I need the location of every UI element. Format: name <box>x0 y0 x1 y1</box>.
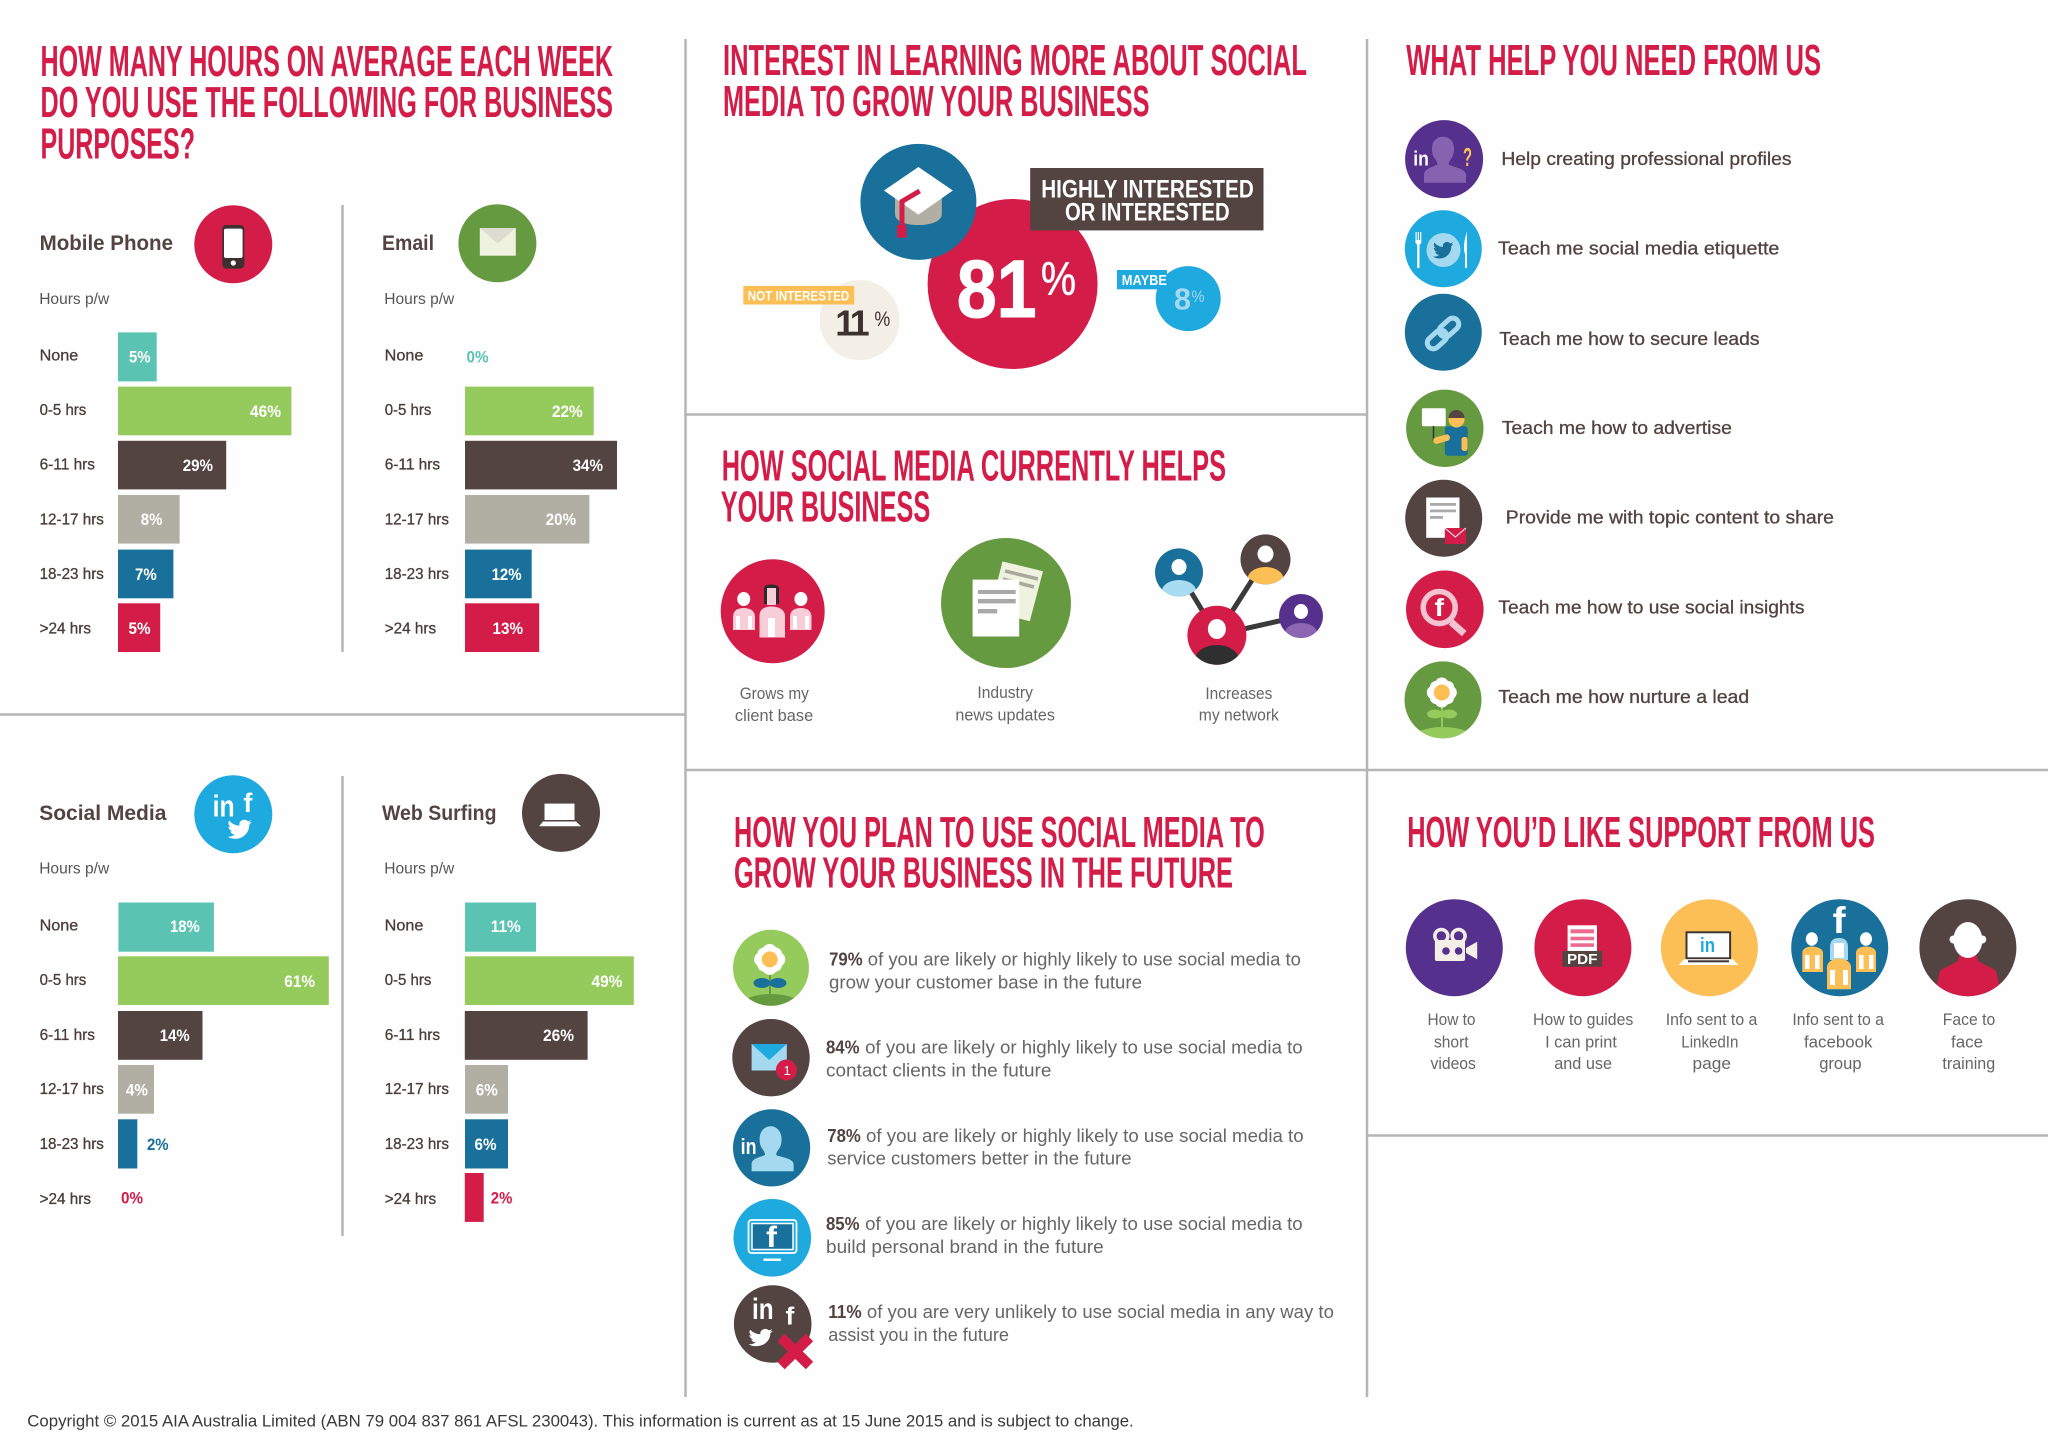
row: None 5%: None <box>40 347 78 364</box>
row: 6-11 hrs 29% <box>40 441 226 489</box>
title: how social media helps <box>721 442 1226 532</box>
row: 6-11 hrs 26%: 26% <box>543 1026 574 1045</box>
item: social insights: f <box>1434 594 1445 622</box>
row: 6-11 hrs 14% <box>40 1011 202 1060</box>
item: PDF guides: and use <box>1554 1055 1612 1073</box>
icon: social media: in <box>213 789 235 824</box>
row: >24 hrs 5%: 5% <box>128 619 150 638</box>
title: how social media helps: YOUR BUSINESS <box>721 484 930 532</box>
row: 0-5 hrs 61%: 0-5 hrs <box>40 972 87 989</box>
row: 12-17 hrs 6%: 6% <box>476 1081 498 1100</box>
icon: laptop <box>522 774 600 852</box>
bar chart: email <box>385 347 617 652</box>
item: 78% service customers: 78% <box>827 1125 861 1146</box>
row: 6-11 hrs 34% <box>385 441 617 489</box>
row: 18-23 hrs 6% <box>385 1119 508 1168</box>
panel: support from us <box>1406 809 2016 1073</box>
item: LinkedIn page: in <box>1700 935 1715 957</box>
row: 18-23 hrs 12%: 12% <box>492 565 522 584</box>
row: 12-17 hrs 4%: 4% <box>126 1081 148 1100</box>
stat: 8% maybe: 8 <box>1174 281 1191 316</box>
item: LinkedIn page: Info sent to a <box>1666 1011 1758 1029</box>
item: 85% personal brand: of you are likely or highly likely to use social media to <box>865 1213 1303 1234</box>
item: professional profiles: ? <box>1463 142 1472 172</box>
item: facebook group: facebook <box>1804 1033 1873 1051</box>
item: 11% very unlikely: f <box>786 1303 795 1331</box>
row: 6-11 hrs 26% <box>385 1011 588 1060</box>
item: social media etiquette <box>1405 210 1779 287</box>
row: 6-11 hrs 29%: 6-11 hrs <box>40 457 95 474</box>
row: 18-23 hrs 2%: 2% <box>147 1135 169 1154</box>
stat: 11% not interested: 11 <box>835 302 870 344</box>
text: Increases my network <box>1199 685 1280 724</box>
row: 12-17 hrs 8%: 12-17 hrs <box>40 511 104 528</box>
stat: 8% maybe: % <box>1192 287 1204 306</box>
stat: 81% highly interested: HIGHLY INTERESTED <box>1041 175 1254 203</box>
title: plans for the future: HOW YOU PLAN TO USE SOCIAL MEDIA TO <box>734 809 1265 857</box>
item: short videos: How to <box>1428 1011 1476 1029</box>
title: plans for the future <box>734 809 1265 898</box>
item: topic content <box>1405 480 1834 557</box>
item: short videos: videos <box>1430 1055 1476 1073</box>
row: 18-23 hrs 12% <box>385 550 532 598</box>
item: 11% very unlikely: assist you in the future <box>828 1324 1009 1345</box>
title: interest in learning: INTEREST IN LEARNING MORE ABOUT SOCIAL <box>723 37 1307 85</box>
item: 11% very unlikely: 11% <box>828 1301 862 1322</box>
item: 79% grow customer base <box>733 930 1300 1006</box>
text: Grows my client base <box>735 685 813 725</box>
text: Hours p/w: Hours p/w <box>384 291 455 308</box>
stat: 11% not interested: NOT INTERESTED <box>748 288 849 304</box>
item: 85% personal brand: f <box>766 1221 778 1254</box>
row: 6-11 hrs 14%: 6-11 hrs <box>40 1027 95 1044</box>
icon: news documents <box>941 538 1071 668</box>
item: social media etiquette: Teach me social media etiquette <box>1498 238 1779 258</box>
panel: social media and web surfing hours <box>39 774 634 1222</box>
footer: copyright: Copyright © 2015 AIA Australia Limited (ABN 79 004 837 861 AFSL 230043). This information is current as at 15 June 2015 and is subject to change. <box>27 1413 1134 1431</box>
heading: Web Surfing: Web Surfing <box>382 802 496 825</box>
row: 18-23 hrs 6%: 18-23 hrs <box>385 1136 449 1153</box>
heading: Social Media: Social Media <box>39 802 167 825</box>
item: 78% service customers: of you are likely or highly likely to use social media to <box>866 1125 1304 1146</box>
item: social insights <box>1406 570 1804 648</box>
row: None 5%: 5% <box>129 348 150 367</box>
stat: 11% not interested: % <box>874 308 890 331</box>
row: 18-23 hrs 2%: 18-23 hrs <box>40 1136 104 1153</box>
text: Increases my network: my network <box>1199 706 1280 724</box>
stat: 81% highly interested: OR INTERESTED <box>1065 198 1230 226</box>
row: 0-5 hrs 49% <box>385 956 634 1005</box>
item: secure leads <box>1405 294 1760 371</box>
item: short videos <box>1406 899 1503 1073</box>
row: >24 hrs 5% <box>40 603 160 652</box>
row: 12-17 hrs 8%: 8% <box>141 510 162 529</box>
panel: plans for the future <box>732 809 1334 1366</box>
item: professional profiles: Help creating professional profiles <box>1501 149 1792 169</box>
text: Grows my client base: client base <box>735 707 813 725</box>
row: 6-11 hrs 26%: 6-11 hrs <box>385 1027 440 1044</box>
icon: client group <box>721 559 825 663</box>
item: 78% service customers: in <box>741 1134 756 1159</box>
item: 78% service customers: service customers better in the future <box>827 1148 1132 1169</box>
title: interest in learning: MEDIA TO GROW YOUR BUSINESS <box>723 78 1150 126</box>
icon: social media <box>194 775 272 853</box>
row: 12-17 hrs 20% <box>385 495 589 544</box>
stat: 11% not interested <box>743 280 900 360</box>
heading: Email: Email <box>382 232 434 255</box>
row: 18-23 hrs 12%: 18-23 hrs <box>385 566 449 583</box>
panel: how social media helps <box>721 442 1323 725</box>
item: 78% service customers <box>733 1109 1304 1186</box>
text: Hours p/w: Hours p/w <box>39 861 110 878</box>
row: 18-23 hrs 7%: 7% <box>135 565 157 584</box>
title: hours per week: PURPOSES? <box>40 120 195 168</box>
row: 0-5 hrs 61% <box>40 956 329 1005</box>
item: 84% contact clients: contact clients in the future <box>826 1060 1051 1080</box>
title: how social media helps: HOW SOCIAL MEDIA CURRENTLY HELPS <box>722 442 1226 490</box>
row: 6-11 hrs 29%: 29% <box>183 456 213 475</box>
stat: 8% maybe: MAYBE <box>1122 273 1167 289</box>
row: 6-11 hrs 14%: 14% <box>160 1026 190 1045</box>
item: face to face training <box>1919 899 2016 1073</box>
text: Grows my client base: Grows my <box>740 685 809 703</box>
row: None 18% <box>40 902 214 952</box>
row: >24 hrs 2%: 2% <box>491 1188 512 1207</box>
item: 79% grow customer base: grow your customer base in the future <box>829 971 1142 992</box>
item: advertise: Teach me how to advertise <box>1502 418 1732 438</box>
item: 85% personal brand: build personal brand in the future <box>826 1236 1104 1257</box>
item: 11% very unlikely <box>734 1285 1334 1366</box>
row: 0-5 hrs 22%: 0-5 hrs <box>385 402 432 419</box>
item: LinkedIn page: page <box>1692 1055 1731 1073</box>
text: Industry news updates <box>955 684 1055 724</box>
text: Industry news updates: news updates <box>955 706 1055 724</box>
title: plans for the future: GROW YOUR BUSINESS IN THE FUTURE <box>734 850 1233 898</box>
row: None 11%: None <box>385 917 423 934</box>
item: short videos: short <box>1434 1033 1469 1051</box>
bar chart: web surfing <box>385 902 634 1222</box>
title: hours per week: DO YOU USE THE FOLLOWING FOR BUSINESS <box>40 79 613 127</box>
item: 79% grow customer base: of you are likely or highly likely to use social media to <box>868 948 1301 969</box>
stat: 81% highly interested: 81 <box>957 244 1037 335</box>
item: facebook group <box>1791 899 1888 1073</box>
item: 85% personal brand: 85% <box>826 1213 860 1234</box>
row: None 11%: 11% <box>491 917 521 936</box>
row: >24 hrs 0% <box>40 1188 143 1208</box>
item: PDF guides: PDF <box>1567 952 1598 968</box>
row: >24 hrs 2% <box>385 1173 512 1222</box>
icon: social media: f <box>243 788 253 818</box>
row: None 0% <box>385 347 488 367</box>
row: 0-5 hrs 46%: 0-5 hrs <box>40 402 87 419</box>
item: 84% contact clients: 1 <box>784 1063 791 1078</box>
row: 0-5 hrs 61%: 61% <box>284 972 315 991</box>
stat: 81% highly interested: % <box>1041 252 1076 305</box>
bar chart: social media <box>40 902 329 1208</box>
text: Increases my network: Increases <box>1205 685 1272 703</box>
row: 0-5 hrs 49%: 49% <box>592 972 622 991</box>
title: interest in learning <box>723 37 1307 126</box>
item: 85% personal brand <box>734 1199 1303 1277</box>
item: 11% very unlikely: in <box>752 1293 774 1326</box>
item: LinkedIn page: LinkedIn <box>1681 1033 1738 1051</box>
row: 12-17 hrs 4%: 12-17 hrs <box>40 1081 104 1098</box>
item: 84% contact clients: 84% <box>826 1037 860 1058</box>
row: >24 hrs 0%: >24 hrs <box>40 1191 91 1208</box>
icon: people network <box>1155 534 1323 675</box>
row: >24 hrs 13%: >24 hrs <box>385 621 436 638</box>
text: Hours p/w: Hours p/w <box>384 861 455 878</box>
text: Hours p/w: Hours p/w <box>39 291 110 308</box>
row: >24 hrs 13%: 13% <box>492 619 523 638</box>
row: None 18%: None <box>40 917 78 934</box>
item: 79% grow customer base: 79% <box>829 948 863 969</box>
panel: interest in learning <box>723 37 1307 369</box>
item: 84% contact clients: of you are likely or highly likely to use social media to <box>865 1037 1303 1058</box>
row: None 11% <box>385 902 536 952</box>
row: >24 hrs 13% <box>385 603 539 652</box>
panel: hours per week <box>39 38 617 652</box>
item: facebook group: f <box>1833 900 1846 941</box>
panel: what help you need <box>1404 37 1834 753</box>
item: facebook group: Info sent to a <box>1792 1011 1885 1029</box>
row: None 0%: 0% <box>466 348 488 367</box>
item: face to face training: training <box>1942 1055 1995 1073</box>
item: facebook group: group <box>1819 1055 1862 1073</box>
row: 6-11 hrs 34%: 34% <box>573 456 603 475</box>
stat: 8% maybe <box>1117 266 1221 331</box>
item: 11% very unlikely: of you are very unlikely to use social media in any way to <box>867 1301 1334 1322</box>
item: advertise <box>1406 390 1732 467</box>
row: 18-23 hrs 7%: 18-23 hrs <box>40 566 104 583</box>
row: 12-17 hrs 8% <box>40 495 180 544</box>
row: >24 hrs 2%: >24 hrs <box>385 1191 436 1208</box>
row: 0-5 hrs 46% <box>40 387 291 435</box>
item: PDF guides: I can print <box>1545 1033 1617 1051</box>
item: 84% contact clients <box>732 1019 1303 1096</box>
title: hours per week <box>40 38 613 168</box>
item: nurture a lead <box>1404 661 1748 738</box>
row: 0-5 hrs 49%: 0-5 hrs <box>385 972 432 989</box>
icon: graduation cap <box>860 144 976 260</box>
title: hours per week: HOW MANY HOURS ON AVERAGE EACH WEEK <box>40 38 613 86</box>
item: secure leads: Teach me how to secure leads <box>1499 329 1760 349</box>
row: 18-23 hrs 6%: 6% <box>474 1135 496 1154</box>
row: 18-23 hrs 2% <box>40 1119 169 1168</box>
row: None 5% <box>40 332 157 381</box>
item: face to face training: Face to <box>1943 1011 1995 1029</box>
item: LinkedIn page <box>1661 899 1758 1073</box>
bar chart: mobile phone <box>40 332 291 652</box>
row: 0-5 hrs 22%: 22% <box>552 402 583 421</box>
row: None 18%: 18% <box>170 917 200 936</box>
stat: 81% highly interested <box>928 168 1264 369</box>
row: 18-23 hrs 7% <box>40 550 173 598</box>
row: 6-11 hrs 34%: 6-11 hrs <box>385 457 440 474</box>
item: PDF guides: How to guides <box>1533 1011 1633 1029</box>
row: 12-17 hrs 6%: 12-17 hrs <box>385 1081 449 1098</box>
item: face to face training: face <box>1951 1033 1983 1051</box>
row: 0-5 hrs 22% <box>385 387 594 435</box>
item: nurture a lead: Teach me how nurture a lead <box>1498 687 1749 707</box>
item: professional profiles <box>1405 120 1792 198</box>
icon: mobile phone <box>194 205 272 283</box>
item: topic content: Provide me with topic content to share <box>1506 508 1834 528</box>
item: social insights: Teach me how to use social insights <box>1498 597 1804 617</box>
row: 12-17 hrs 6% <box>385 1065 508 1114</box>
heading: Mobile Phone: Mobile Phone <box>40 232 173 255</box>
icon: email <box>458 204 536 282</box>
row: >24 hrs 5%: >24 hrs <box>40 621 91 638</box>
row: 12-17 hrs 20%: 20% <box>546 510 576 529</box>
row: 12-17 hrs 20%: 12-17 hrs <box>385 511 449 528</box>
row: None 0%: None <box>385 347 423 364</box>
item: PDF guides <box>1533 899 1633 1073</box>
row: 0-5 hrs 46%: 46% <box>250 402 281 421</box>
item: professional profiles: in <box>1413 148 1429 170</box>
row: 12-17 hrs 4% <box>40 1065 154 1114</box>
row: >24 hrs 0%: 0% <box>121 1188 143 1207</box>
text: Industry news updates: Industry <box>977 684 1034 702</box>
